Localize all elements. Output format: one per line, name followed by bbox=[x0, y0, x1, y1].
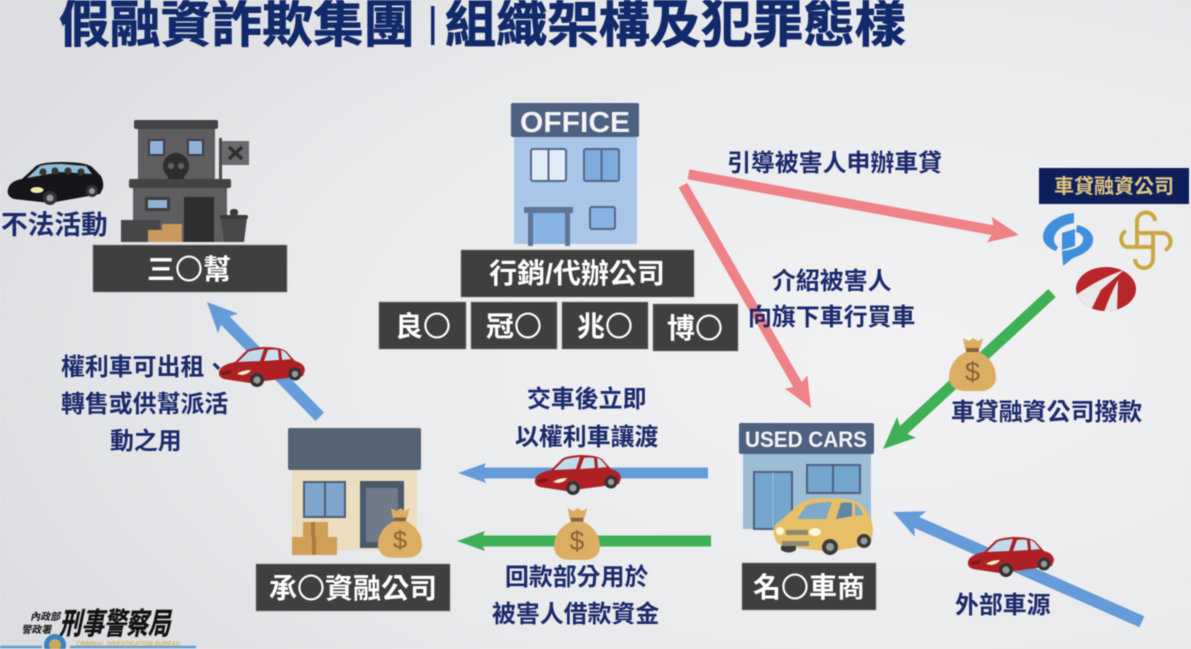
text: external car source: 外部車源 bbox=[955, 592, 1051, 619]
heading: car-loan finance company: 車貸融資公司 bbox=[1054, 174, 1174, 198]
icon: black car with gang members bbox=[8, 162, 103, 205]
panel: car-loan finance companies bbox=[1039, 168, 1189, 312]
label box: company one: 良〇 bbox=[395, 311, 451, 342]
label box: company two bbox=[471, 302, 557, 349]
label box: marketing company: 行銷/代辦公司 bbox=[489, 258, 665, 289]
label box: company four bbox=[653, 304, 738, 351]
logo: criminal investigation bureau bbox=[0, 607, 196, 649]
text: transfer after delivery line one: 交車後立即 bbox=[527, 385, 646, 413]
arrow: dealer to finance company, money bbox=[457, 531, 711, 551]
label box: company one bbox=[379, 302, 466, 349]
text: car usage line two: 轉售或供幫派活 bbox=[61, 391, 228, 418]
text: finance company disburses: 車貸融資公司撥款 bbox=[951, 399, 1142, 426]
text: repayment line two: 被害人借款資金 bbox=[492, 600, 659, 628]
icon: red car on gang arrow bbox=[219, 347, 305, 387]
label box: marketing company bbox=[461, 250, 694, 297]
label box: company two: 冠〇 bbox=[486, 311, 542, 342]
icon: blue logo bbox=[1043, 213, 1093, 266]
icon: office building: OFFICE bbox=[520, 107, 630, 139]
icon: used car dealer bbox=[739, 423, 874, 555]
logo: criminal investigation bureau: 刑事警察局 bbox=[58, 607, 176, 641]
icon: money bag on green arrow bbox=[949, 338, 996, 391]
icon: red logo bbox=[1076, 267, 1136, 312]
icon: office building bbox=[511, 103, 639, 246]
logo: criminal investigation bureau: 警政署 bbox=[21, 623, 54, 636]
icon: finance company house bbox=[288, 428, 422, 558]
arrow: dealer to finance company, car transfer bbox=[458, 463, 708, 483]
icon: used car dealer: USED CARS bbox=[745, 427, 867, 452]
icon: external red car bbox=[968, 537, 1054, 577]
label box: company three bbox=[562, 302, 648, 349]
label box: company four: 博〇 bbox=[667, 313, 723, 344]
label box: gang: 三〇幫 bbox=[147, 254, 231, 285]
text: introduce victims: 介紹被害人 bbox=[772, 267, 892, 295]
arrow: to gang bbox=[197, 292, 330, 427]
arrow: finance company payment to dealer bbox=[874, 283, 1062, 459]
title bbox=[59, 0, 906, 53]
label box: company three: 兆〇 bbox=[577, 311, 633, 342]
label box: finance company: 承〇資融公司 bbox=[269, 573, 437, 604]
arrow: external car source bbox=[887, 499, 1148, 635]
heading: car-loan finance company bbox=[1039, 168, 1189, 204]
text: transfer after delivery line two: 以權利車讓渡 bbox=[515, 423, 658, 451]
label: illegal activity: 不法活動 bbox=[1, 210, 108, 240]
icon: yellow car bbox=[774, 498, 873, 555]
label box: car dealer bbox=[742, 563, 876, 610]
icon: gold logo bbox=[1121, 212, 1171, 268]
arrow: marketing company to car-loan finance company bbox=[686, 162, 1021, 248]
logo: criminal investigation bureau: CRIMINAL INVESTIGATION BUREAU bbox=[76, 639, 180, 648]
label box: finance company bbox=[256, 564, 450, 611]
text: repayment line one: 回款部分用於 bbox=[505, 564, 648, 591]
text: car usage line one: 權利車可出租、 bbox=[61, 354, 228, 381]
icon: gang building bbox=[121, 120, 249, 242]
arrow: marketing company to car dealer bbox=[672, 179, 822, 414]
text: guide victims to apply for car loan: 引導被害人申辦車貸 bbox=[727, 149, 942, 177]
text: car usage line three: 動之用 bbox=[110, 427, 182, 455]
label box: car dealer: 名〇車商 bbox=[753, 572, 865, 603]
text: buy at affiliated dealer: 向旗下車行買車 bbox=[748, 304, 915, 331]
icon: money bag on green arrow bbox=[554, 508, 600, 560]
icon: red car on blue arrow bbox=[535, 455, 621, 495]
label box: gang bbox=[93, 245, 287, 292]
logo: criminal investigation bureau: 內政部 bbox=[30, 610, 62, 623]
